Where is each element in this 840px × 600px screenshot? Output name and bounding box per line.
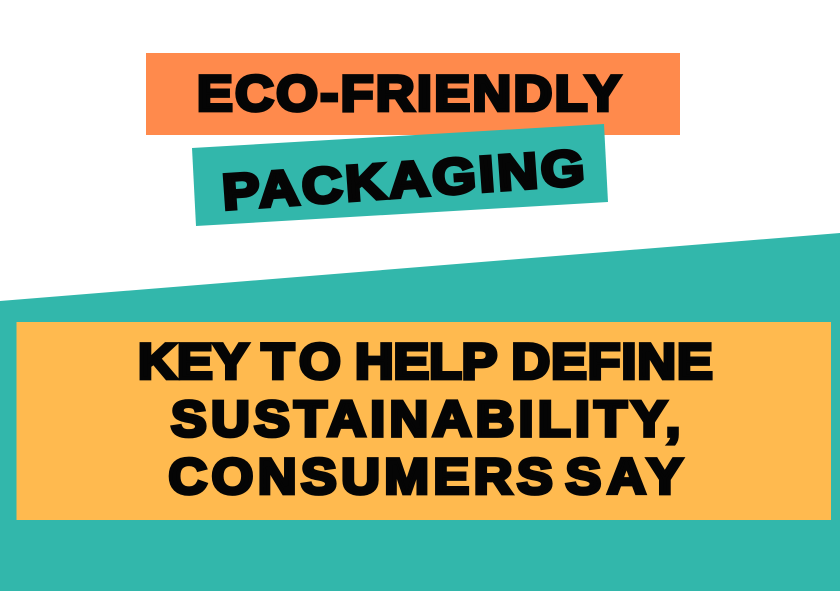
teal slanted background [0, 233, 840, 591]
panel: title line two [192, 124, 608, 226]
panel: title line one: ECO-FRIENDLY [197, 65, 621, 121]
panel: headline: SAY [566, 448, 683, 504]
panel: headline: HELP [355, 333, 497, 389]
panel: headline [16, 322, 831, 520]
panel: title line two: PACKAGING [220, 140, 586, 221]
panel: headline: TO [262, 333, 341, 389]
panel: headline: SUSTAINABILITY, [171, 391, 680, 447]
panel: headline: KEY [138, 333, 249, 389]
panel: headline: DEFINE [512, 333, 713, 389]
panel: title line one [146, 53, 680, 135]
panel: headline: CONSUMERS [168, 448, 553, 504]
